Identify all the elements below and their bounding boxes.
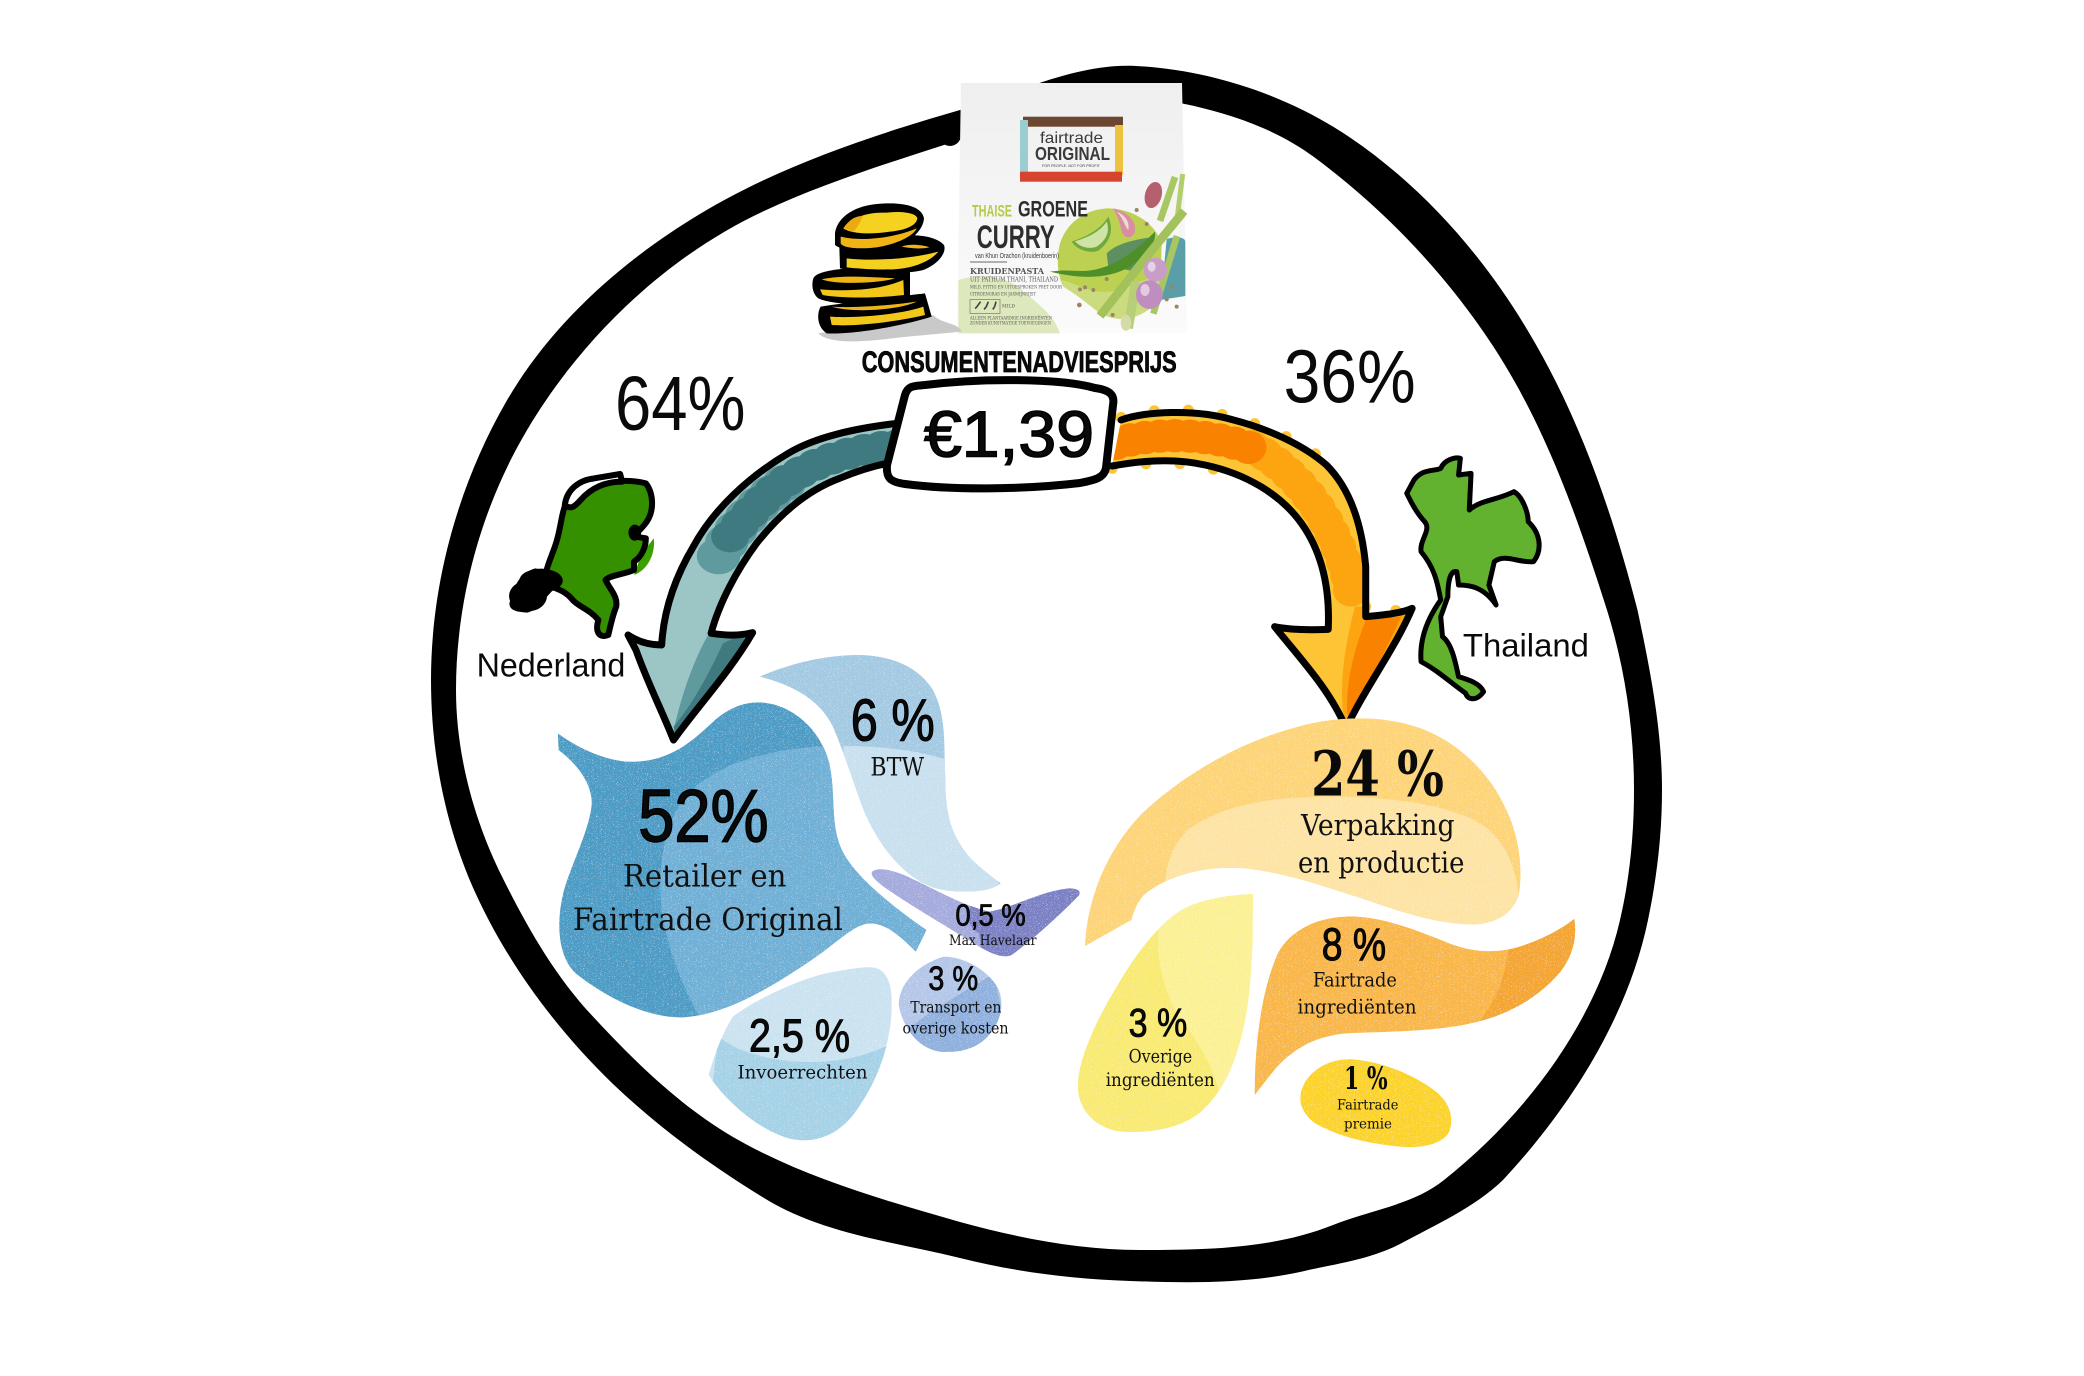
label: Retailer en <box>623 859 787 895</box>
label: ingrediënten <box>1106 1069 1215 1091</box>
price value: €1,39 <box>924 398 1094 471</box>
value: 3 % <box>1129 1002 1187 1046</box>
value: 52% <box>638 775 769 858</box>
label: Transport en <box>910 998 1001 1017</box>
value: 2,5 % <box>749 1010 850 1062</box>
label: Nederland: Nederland <box>477 647 625 684</box>
label: Fairtrade <box>1313 968 1397 992</box>
label: Thailand: Thailand <box>1463 628 1589 664</box>
segment: 52% retailer <box>558 702 926 1018</box>
segment: 3% transport <box>898 956 1008 1052</box>
package small print: KRUIDENPASTA <box>970 267 1044 277</box>
share: 36% Thailand: 36% <box>1284 334 1416 418</box>
arrow: teal to Nederland 64% <box>628 423 899 743</box>
value: 6 % <box>851 688 935 754</box>
segment: 0,5% Max Havelaar <box>872 869 1080 956</box>
blob: 6% <box>754 653 1004 897</box>
blob: 2,5% <box>704 963 897 1143</box>
price box <box>887 380 1113 488</box>
share: 64% Nederland: 64% <box>615 361 746 447</box>
brand logo: ORIGINAL <box>1035 144 1110 164</box>
value: 0,5 % <box>955 898 1026 933</box>
label <box>902 998 1008 1037</box>
icon: coin stack <box>812 203 962 341</box>
segment: 8% Fairtrade ingrediënten <box>1253 913 1581 1100</box>
arrow: orange to Thailand 36% <box>1112 410 1419 730</box>
package small print <box>969 253 1062 326</box>
segment: 3% overige ingrediënten <box>1074 890 1260 1137</box>
label: ingrediënten <box>1298 994 1417 1018</box>
segment: 6% BTW <box>754 653 1004 897</box>
blob: 8% <box>1253 913 1581 1100</box>
blob: 52% <box>558 702 926 1018</box>
package small print: ZONDER KUNSTMATIGE TOEVOEGINGEN <box>970 320 1051 326</box>
package title: GROENE <box>1018 197 1088 222</box>
package title: CURRY <box>977 219 1055 255</box>
label: overige kosten <box>902 1018 1008 1037</box>
value: 1 % <box>1344 1061 1388 1097</box>
value: 8 % <box>1322 919 1386 970</box>
blob: 24% <box>1081 713 1524 950</box>
label <box>1298 808 1464 879</box>
package small print: MILD, PITTIG EN UITGESPROKEN PRET DOOR <box>970 285 1062 291</box>
label: Fairtrade Original <box>573 902 843 938</box>
heading: consumentenadviesprijs: CONSUMENTENADVIESPRIJS <box>862 346 1177 379</box>
label: BTW <box>870 753 924 782</box>
label <box>573 859 843 938</box>
blob: 0,5% <box>872 869 1080 956</box>
label: premie <box>1344 1116 1392 1132</box>
label: Invoerrechten <box>738 1061 868 1083</box>
label <box>1298 968 1417 1018</box>
value: 3 % <box>928 960 978 998</box>
segment: 24% verpakking <box>1081 713 1524 950</box>
package title: THAISE <box>972 202 1012 221</box>
label: Max Havelaar <box>949 933 1037 949</box>
package title <box>972 197 1088 255</box>
brand logo <box>1020 117 1123 182</box>
label: en productie <box>1298 845 1464 879</box>
package small print: UIT PATHUM THANI, THAILAND <box>970 277 1058 284</box>
brand logo: FOR PEOPLE. NOT FOR PROFIT <box>1042 163 1101 168</box>
blob: 3% overige <box>1074 890 1260 1137</box>
segment: 2,5% invoerrechten <box>704 963 897 1143</box>
package small print: CITROENGRAS EN JASMIJNRIJST <box>970 291 1036 297</box>
package small print: MILD <box>1002 304 1015 310</box>
package artwork <box>958 174 1185 333</box>
blob: 3% transport <box>898 956 1002 1052</box>
brand logo: fairtrade <box>1040 130 1103 147</box>
outer hand-drawn ring <box>431 66 1662 1282</box>
map: Nederland <box>509 474 654 636</box>
map: Thailand <box>1407 458 1539 699</box>
package small print: ALLEEN PLANTAARDIGE INGREDIËNTEN <box>969 314 1052 321</box>
label: Verpakking <box>1300 808 1455 842</box>
product package: Thaise Groene Curry <box>957 83 1187 333</box>
label <box>1337 1097 1398 1132</box>
package small print: van Khun Orachon (kruidenboerin) <box>975 253 1059 260</box>
value: 24 % <box>1311 738 1444 811</box>
label <box>1106 1045 1215 1091</box>
label: Fairtrade <box>1337 1097 1398 1113</box>
label: Overige <box>1129 1045 1192 1067</box>
blob: 1% <box>1300 1059 1451 1147</box>
segment: 1% Fairtrade premie <box>1300 1059 1451 1147</box>
